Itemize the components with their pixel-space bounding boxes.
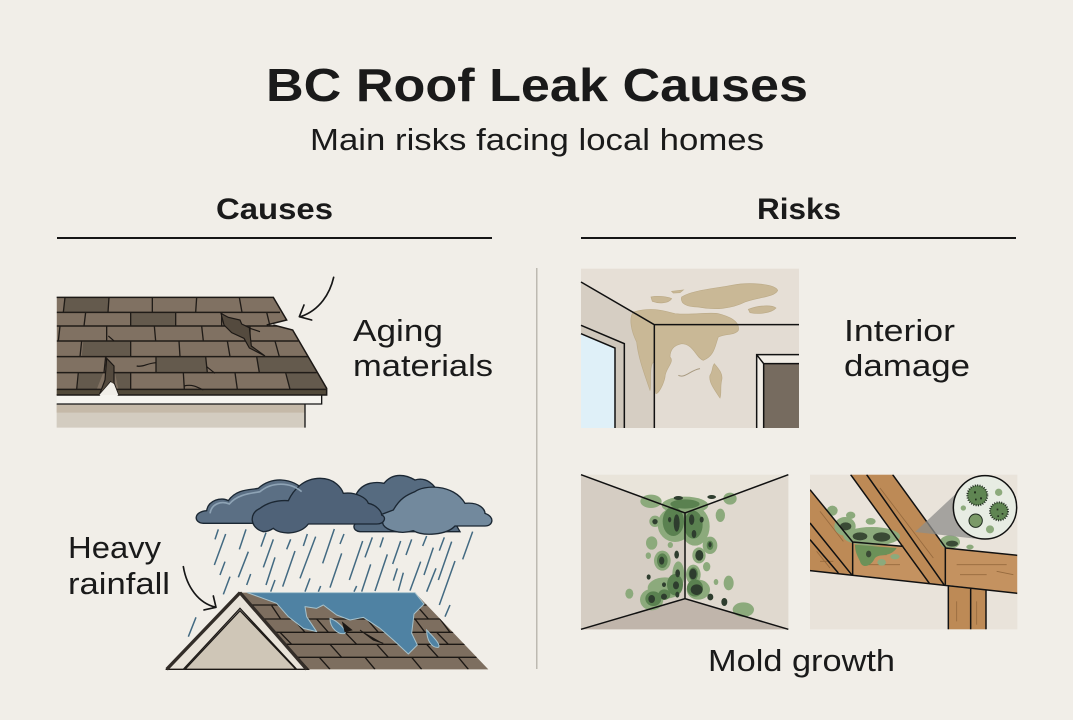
- cloud highlights: [210, 484, 302, 513]
- water: [247, 593, 424, 654]
- gable: [167, 593, 308, 669]
- arrow: [299, 277, 334, 320]
- label: aging materials: materials: [353, 348, 493, 383]
- magnified spores: [953, 476, 1017, 539]
- crack: upper right: [221, 313, 265, 356]
- heading: risks: Risks: [757, 193, 841, 226]
- label: aging materials: Aging: [353, 313, 443, 348]
- rain: [188, 529, 473, 637]
- water stains: [631, 284, 778, 398]
- mold: [827, 506, 974, 566]
- mold spots: dark: [647, 495, 727, 606]
- roof shingles: [240, 593, 488, 669]
- label: interior damage: Interior: [844, 313, 955, 348]
- icon: interior damage: [581, 269, 799, 428]
- mold spots: light: [625, 493, 754, 617]
- heading: causes: Causes: [216, 193, 333, 226]
- label: interior damage: [844, 313, 970, 383]
- label: heavy rainfall: [68, 530, 170, 601]
- arrow: [183, 567, 216, 610]
- label: mold growth: Mold growth: [708, 643, 895, 678]
- label: heavy rainfall: rainfall: [68, 566, 170, 601]
- panel: causes: [53, 193, 493, 669]
- label: heavy rainfall: Heavy: [68, 530, 162, 565]
- clouds: [196, 475, 492, 534]
- subtitle: Main risks facing local homes: [310, 122, 764, 157]
- label: aging materials: [353, 313, 493, 383]
- panel: risks: [581, 193, 1017, 678]
- callout wedge: [915, 493, 975, 539]
- icon: heavy rainfall on roof: [167, 475, 492, 669]
- icon: mold on attic beams with magnified spores: [810, 475, 1017, 629]
- mold spots: mid: [645, 499, 713, 606]
- icon: aging roof shingles: [53, 277, 334, 428]
- icon: mold on wall corner: [581, 475, 788, 629]
- wood beams: [810, 475, 1017, 629]
- infographic: [56, 68, 1018, 678]
- label: interior damage: damage: [844, 348, 970, 383]
- title: BC Roof Leak Causes: [266, 59, 808, 111]
